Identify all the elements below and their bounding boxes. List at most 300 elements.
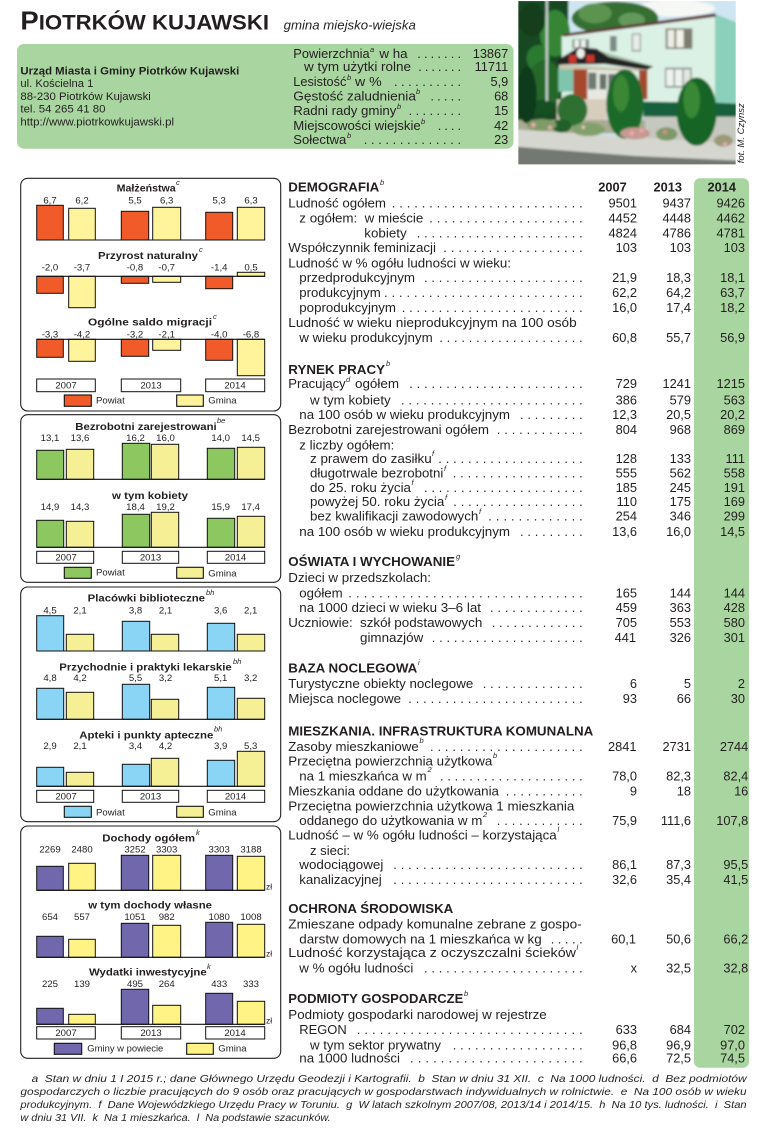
chart: w tym dochody własne: 1080 [209,912,230,923]
chart: Bezrobotni zarejestrowani: 16,0 [156,433,175,444]
section: Demografia: . . . . . . . . . . . . . . . . . . . . . . . . . . [392,195,583,210]
section: Oświata i wychowanie: Dzieci w przedszkolach: [288,570,431,585]
section: Rynek pracy: f [412,478,414,487]
chart: Placówki biblioteczne: Placówki biblioteczne [88,593,205,605]
chart: Wydatki inwestycyjne: 495 [127,979,143,990]
section: Rynek pracy: 1215 [717,376,745,391]
section: Ochrona środowiska: Ludność korzystająca z oczyszczalni ścieków [288,945,577,960]
section: Demografia: . . . . . . . . . . . . . . . . . . . [443,240,583,255]
section: Rynek pracy: 254 [616,509,637,524]
legend [54,1043,247,1055]
section: Rynek pracy: powyżej 50. roku życia [310,494,445,509]
key statistics: w ha [378,46,409,61]
section: Oświata i wychowanie: 363 [670,600,691,615]
section: Demografia: . . . . . . . . . . . . . . . . . . . . [439,330,583,345]
section: Demografia: DEMOGRAFIA [288,180,379,195]
year axis: 2013 [140,792,161,803]
year axis: 2014 [224,1028,246,1039]
chart: Ogólne saldo migracji: -6,8 [243,329,259,340]
chart: Apteki i punkty apteczne: 5,3 [244,741,257,752]
section: Podmioty gospodarcze: 97,0 [720,1037,745,1052]
footnotes: produkcyjnym. f Dane Wojewódzkiego Urzędu Pracy w Toruniu. g W latach szkolnym 2007/08, 2013/14 i 2014/15. h Na 10 tys. ludności. i Stan [19,1100,747,1111]
section: Demografia: 63,7 [720,285,745,300]
chart: Przychodnie i praktyki lekarskie: 3,2 [244,673,257,684]
chart: Ogólne saldo migracji: -2,1 [158,329,175,340]
section: Ochrona środowiska: w % ogółu ludności [298,960,413,975]
chart: Przychodnie i praktyki lekarskie: 5,5 [129,673,142,684]
section: Demografia: Ludność w % ogółu ludności w wieku: [288,255,511,270]
section: Baza noclegowa: . . . . . . . . . . . . . . . . . . . . . . . . [408,691,583,706]
chart: w tym dochody własne: zł [266,948,272,958]
key statistics: . . . . . . . . . . . . . . [364,132,461,147]
section: Demografia: . . . . . . . . . . . . . . . . . . . . . . . [417,225,583,240]
section: Demografia: 103 [670,240,691,255]
footnotes: w dniu 31 VII. k Na 1 mieszkańca. l Na podstawie szacunków. [20,1113,331,1124]
chart: Przychodnie i praktyki lekarskie: 4,8 [43,673,57,684]
chart: Apteki i punkty apteczne [37,724,265,786]
chart: Przyrost naturalny: 0,5 [244,263,258,274]
section: Rynek pracy: . . . . . . . . . [520,524,583,539]
section: Rynek pracy: d [346,375,351,384]
section: Demografia: 18,3 [666,270,691,285]
section: Mieszkania: 82,4 [723,768,748,783]
chart: Przyrost naturalny [37,245,265,308]
chart: Apteki i punkty apteczne: 3,4 [129,741,143,752]
chart: w tym kobiety: w tym kobiety [111,490,188,502]
section: Podmioty gospodarcze: Podmioty gospodarki narodowej w rejestrze [288,1007,547,1022]
section: Demografia: 9437 [663,195,691,210]
legend: Gmina [208,395,237,406]
year axis [37,551,265,564]
chart: Dochody ogółem: 2269 [39,845,61,856]
chart: w tym kobiety: 14,9 [41,502,59,513]
chart: Przyrost naturalny: -3,7 [74,263,90,274]
section: Mieszkania: 18 [677,783,691,798]
key statistics: . . . . [438,118,461,133]
section: Rynek pracy: 16,0 [666,524,691,539]
chart: w tym kobiety: 19,2 [156,502,175,513]
section: Rynek pracy: RYNEK PRACY [288,362,385,377]
panel: libraries and health charts [21,587,281,822]
key statistics: 15 [494,103,508,118]
section: Rynek pracy: 804 [616,422,637,437]
year axis: 2007 [55,792,77,803]
section: Demografia: Ludność w wieku nieprodukcyjnym na 100 osób [288,315,577,330]
key statistics: w % [354,74,382,89]
section: Mieszkania: 32,6 [612,872,637,887]
section: Mieszkania: . . . . . . . . . . . . [497,813,583,828]
panel: budget charts [21,826,281,1058]
section: Mieszkania: na 1 mieszkańca w m [299,768,427,783]
section: Rynek pracy: 191 [724,480,745,495]
section: Mieszkania: 2 [482,810,488,819]
section: Ochrona środowiska: . . . . . [551,931,583,946]
section: Podmioty gospodarcze: REGON [299,1022,347,1037]
section: Demografia: 9501 [609,195,637,210]
year axis: 2014 [225,792,247,803]
key statistics: 68 [494,88,508,104]
section: Demografia: 9426 [717,195,745,210]
section: Rynek pracy: . . . . . . . . . . . . . . . . . . . . [438,451,583,466]
section: Mieszkania: . . . . . . . . . . . [506,783,583,798]
section: Rynek pracy: f [444,464,447,473]
section: Rynek pracy: 563 [724,392,745,407]
section: Demografia: Ludność ogółem [288,195,386,210]
section: Baza noclegowa: 5 [684,676,691,691]
table header: years: 2014 [708,180,737,195]
address block: tel. 54 265 41 80 [20,104,106,116]
chart: Apteki i punkty apteczne: 2,1 [73,741,87,752]
chart: Dochody ogółem: k [196,828,201,837]
section: Oświata i wychowanie: . . . . . . . . . . . . . [492,615,583,630]
section: Mieszkania: Przeciętna powierzchnia użytkowa 1 mieszkania [288,798,575,813]
chart: Przyrost naturalny: -0,7 [158,263,175,274]
section: Mieszkania: 16 [734,783,748,798]
footnotes: gospodarczych o liczbie pracujących do 9 osób oraz pracujących w gospodarstwach indywidualnych w rolnictwie. e Na 100 osób w wieku [20,1087,747,1098]
key statistics: Lesistość [293,74,347,89]
key statistics [293,45,508,147]
chart: Ogólne saldo migracji: c [213,312,217,321]
chart: Ogólne saldo migracji: -3,2 [127,329,143,340]
table header: years [598,180,737,195]
section: Oświata i wychowanie: 705 [616,615,637,630]
section: Mieszkania: 78,0 [612,768,637,783]
section: Rynek pracy: . . . . . . . . . . . . . . . . . . . . . . . . [409,376,583,391]
panel: municipality info [17,44,514,149]
chart: Apteki i punkty apteczne: 2,9 [43,741,57,752]
section: Ochrona środowiska: 32,5 [666,960,691,975]
key statistics: Sołectwa [293,132,347,147]
chart: w tym dochody własne: 1051 [124,912,146,923]
section: Demografia: 56,9 [720,330,745,345]
title: PIOTRKÓW KUJAWSKI [20,5,269,35]
section: Podmioty gospodarcze [288,989,745,1066]
section: Ochrona środowiska: x [631,960,638,975]
section: Ochrona środowiska: darstw domowych na 1 mieszkańca w kg [299,931,542,946]
chart: Wydatki inwestycyjne: 139 [74,979,90,990]
title: gmina miejsko-wiejska [284,18,416,32]
section: Mieszkania: . . . . . . . . . . . . . . . . . . . . . . . . . . [393,872,583,887]
chart: Wydatki inwestycyjne [37,962,272,1025]
chart: w tym kobiety: 15,9 [211,502,230,513]
section: Oświata i wychowanie: 165 [616,585,637,600]
section: Mieszkania: 2731 [663,739,691,754]
section: Oświata i wychowanie: . . . . . . . . . . . . . [490,600,583,615]
chart: Bezrobotni zarejestrowani: 13,1 [41,433,59,444]
chart: Przyrost naturalny: c [199,245,203,254]
section: Mieszkania: kanalizacyjnej [299,872,382,887]
chart: w tym dochody własne: 557 [74,912,90,923]
section: Baza noclegowa: 6 [630,676,637,691]
chart: w tym dochody własne: 654 [42,912,59,923]
chart: w tym dochody własne: 982 [159,912,175,923]
section: Rynek pracy: 128 [616,451,637,466]
chart: Wydatki inwestycyjne: 333 [243,979,259,990]
key statistics: b [421,117,425,126]
section: Demografia: 103 [724,240,745,255]
legend: Gmina [208,569,237,580]
section: Rynek pracy: . . . . . . . . . . . . [497,422,583,437]
section: Rynek pracy: 245 [670,480,691,495]
section: Demografia: poprodukcyjnym [299,300,396,315]
section: Demografia: 62,2 [612,285,637,300]
section: Mieszkania: wodociągowej [298,857,383,872]
legend [64,806,237,819]
section: Rynek pracy: 133 [670,451,691,466]
section: Rynek pracy: na 100 osób w wieku produkcyjnym [299,407,510,422]
section: Mieszkania: b [420,736,424,745]
section: Rynek pracy: do 25. roku życia [310,480,412,495]
address block: Urząd Miasta i Gminy Piotrków Kujawski [20,65,239,77]
section: Oświata i wychowanie: 301 [724,630,745,645]
section: Podmioty gospodarcze: 702 [724,1022,745,1037]
chart: Bezrobotni zarejestrowani: 16,2 [126,433,145,444]
section: Mieszkania: 86,1 [612,857,637,872]
year axis [37,379,265,392]
chart: Ogólne saldo migracji: -4,0 [211,329,227,340]
key statistics: . . . . . . . . [409,103,461,118]
chart: Apteki i punkty apteczne: Apteki i punkty apteczne [79,729,213,741]
chart: Dochody ogółem: 3252 [124,845,146,856]
section: Demografia [288,178,745,345]
section: Rynek pracy [288,359,745,539]
section: Oświata i wychowanie: Uczniowie: [288,615,353,630]
key statistics: . . . . . . . [417,46,461,61]
chart: Bezrobotni zarejestrowani [37,416,265,479]
section: Mieszkania: z sieci: [310,843,350,858]
section: Ochrona środowiska: . . . . . . . . . . . . . . . . . . . . . . [424,960,583,975]
chart: Apteki i punkty apteczne: 3,9 [214,741,227,752]
section: Oświata i wychowanie [288,552,745,645]
section: Ochrona środowiska: 66,2 [723,931,748,946]
section: Rynek pracy: Pracujący [288,376,346,391]
key statistics: b [416,87,420,96]
section: Rynek pracy: 12,3 [612,407,637,422]
section: Baza noclegowa: 30 [731,691,745,706]
chart: Ogólne saldo migracji: Ogólne saldo migracji [88,317,212,329]
section: Oświata i wychowanie: ogółem [299,585,343,600]
chart: Placówki biblioteczne: 4,5 [43,605,57,616]
chart: Ogólne saldo migracji: -3,3 [42,329,58,340]
section: Oświata i wychowanie: gimnazjów [360,630,424,645]
chart: Przychodnie i praktyki lekarskie: bh [233,657,241,666]
chart: Bezrobotni zarejestrowani: 14,5 [241,433,260,444]
section: Baza noclegowa [288,658,745,706]
section: Rynek pracy: 185 [616,480,637,495]
section: Oświata i wychowanie: 441 [615,630,636,645]
year axis: 2007 [55,1028,77,1039]
section: Oświata i wychowanie: szkół podstawowych [360,615,482,630]
year axis: 2014 [224,381,246,392]
section: Rynek pracy: 562 [670,465,691,480]
section: Rynek pracy: 13,6 [612,524,637,539]
year axis [37,1027,265,1039]
key statistics: 13867 [473,46,508,61]
section: Ochrona środowiska: OCHRONA ŚRODOWISKA [288,901,453,916]
chart: Bezrobotni zarejestrowani: 13,6 [71,433,89,444]
section: Baza noclegowa: i [418,658,420,667]
section: Podmioty gospodarcze: b [464,989,468,998]
section: Mieszkania: Zasoby mieszkaniowe [288,739,419,754]
section: Mieszkania: Mieszkania oddane do użytkowania [288,783,500,798]
section: Rynek pracy: 558 [724,465,745,480]
section: Mieszkania: 107,8 [716,813,748,828]
section: Demografia: 4452 [609,210,637,225]
legend: Powiat [96,568,125,579]
chart: w tym kobiety: 18,4 [126,502,145,513]
section: Baza noclegowa: 93 [623,691,637,706]
section: Demografia: 64,2 [666,285,691,300]
chart: Bezrobotni zarejestrowani: be [217,416,225,425]
chart: Wydatki inwestycyjne: k [207,962,212,971]
chart: w tym kobiety [37,490,265,547]
section: Demografia: 4824 [609,225,637,240]
section: Oświata i wychowanie: 459 [616,600,637,615]
section: Rynek pracy: 346 [670,509,691,524]
chart: Małżeństwa: 6,7 [43,195,57,206]
table header: years: 2013 [654,180,682,195]
section: Podmioty gospodarcze: 66,6 [612,1051,637,1066]
section: Demografia: 17,4 [666,300,691,315]
section: Mieszkania: 2744 [720,739,748,754]
chart: Małżeństwa: 6,3 [160,195,173,206]
section: Podmioty gospodarcze: . . . . . . . . . . . . . . . . . . . . . . . . . . . . . . [357,1022,583,1037]
section: Oświata i wychowanie: 144 [670,585,691,600]
address block: http://www.piotrkowkujawski.pl [20,116,174,128]
section: Oświata i wychowanie: g [456,552,461,561]
section: Demografia: . . . . . . . . . . . . . . . . . . . . . [429,210,583,225]
section: Rynek pracy: 579 [670,392,691,407]
legend: Powiat [96,808,125,819]
section: Mieszkania: Przeciętna powierzchnia użytkowa [288,754,493,769]
section: Rynek pracy: . . . . . . . . . [520,407,583,422]
section: Rynek pracy: 386 [616,392,637,407]
section: Rynek pracy: na 100 osób w wieku produkcyjnym [299,524,510,539]
key statistics: Gęstość zaludnienia [293,88,417,104]
section: Podmioty gospodarcze: na 1000 ludności [299,1051,400,1066]
legend: Gmina [218,1044,247,1055]
chart: Placówki biblioteczne: 3,6 [214,605,227,616]
section: Demografia: 16,0 [612,300,637,315]
chart: Przychodnie i praktyki lekarskie: 5,1 [214,673,227,684]
legend [64,567,237,580]
section: Baza noclegowa: Turystyczne obiekty noclegowe [288,676,473,691]
section: Ochrona środowiska [288,901,748,975]
section: Rynek pracy: . . . . . . . . . . . . . [488,509,583,524]
section: Demografia: b [380,178,384,187]
section: Rynek pracy: z liczby ogółem: [299,437,394,452]
year axis [37,790,265,803]
section: Ochrona środowiska: Zmieszane odpady komunalne zebrane z gospo- [288,916,582,931]
chart: Placówki biblioteczne: 2,1 [159,605,172,616]
section: Demografia: . . . . . . . . . . . . . . . . . . . . . . [424,270,583,285]
section: Baza noclegowa: 66 [677,691,691,706]
key statistics: b [397,102,401,111]
address block: 88-230 Piotrków Kujawski [20,91,151,103]
chart: w tym kobiety: 17,4 [241,502,261,513]
section: Mieszkania: l [558,825,560,834]
chart: Dochody ogółem: 3188 [240,845,262,856]
section: Mieszkania: oddanego do użytkowania w m [299,813,482,828]
section: Rynek pracy: długotrwale bezrobotni [310,465,443,480]
key statistics: Miejscowości wiejskie [293,118,421,133]
section: Rynek pracy: 175 [670,494,691,509]
footnotes [19,1074,747,1124]
section: Rynek pracy: 20,5 [666,407,691,422]
chart: Placówki biblioteczne: 2,1 [244,605,257,616]
year axis: 2013 [140,1028,162,1039]
section: Podmioty gospodarcze: 633 [616,1022,637,1037]
address block: ul. Kościelna 1 [20,78,94,90]
section: Ochrona środowiska: 50,6 [666,931,691,946]
legend: Gmina [208,808,237,819]
year axis: 2013 [140,381,162,392]
section: Ochrona środowiska: 32,8 [723,960,748,975]
section: Ochrona środowiska: 60,1 [611,931,636,946]
section: Demografia: 60,8 [612,330,637,345]
chart: Bezrobotni zarejestrowani: 14,0 [211,433,230,444]
chart: Małżeństwa: 5,5 [128,195,142,206]
chart: w tym kobiety: 14,3 [71,502,89,513]
section: Podmioty gospodarcze: . . . . . . . . . . . . . . . . . . [453,1037,583,1052]
photo credit: fot. M. Czynsz [736,103,747,163]
chart: Placówki biblioteczne [37,588,265,651]
chart: Przyrost naturalny: -2,0 [42,263,58,274]
chart: w tym dochody własne: w tym dochody własne [87,900,212,912]
section: Rynek pracy: 729 [616,376,637,391]
section: Mieszkania: Ludność – w % ogółu ludności – korzystająca [288,827,558,842]
section: Demografia: 55,7 [666,330,691,345]
chart: Bezrobotni zarejestrowani: Bezrobotni zarejestrowani [75,421,217,433]
chart: Dochody ogółem: 3303 [209,845,230,856]
chart: Małżeństwa: 5,3 [213,195,226,206]
chart: Wydatki inwestycyjne: Wydatki inwestycyjne [89,967,207,979]
chart: Placówki biblioteczne: 2,1 [73,605,87,616]
chart: Przyrost naturalny: -0,8 [127,263,143,274]
section: Demografia: z ogółem: w mieście [299,210,423,225]
key statistics: 11711 [475,59,508,74]
year axis: 2007 [55,381,77,392]
section: Demografia: produkcyjnym [299,285,381,300]
chart: Dochody ogółem [37,828,272,891]
section: Rynek pracy: 14,5 [720,524,745,539]
chart: Małżeństwa [37,178,265,240]
chart: Placówki biblioteczne: bh [206,588,214,597]
section: Demografia: 4448 [663,210,691,225]
section: Oświata i wychowanie: 144 [724,585,745,600]
chart: w tym dochody własne: 1008 [240,912,262,923]
key statistics: b [347,131,351,140]
section: Demografia: 103 [616,240,637,255]
section: Baza noclegowa: BAZA NOCLEGOWA [288,661,417,676]
footnotes: a Stan w dniu 1 I 2015 r.; dane Głównego Urzędu Geodezji i Kartografii. b Stan w dniu 31 XII. c Na 1000 ludności. d Bez podmiotów [32,1074,747,1085]
section: Demografia: 18,1 [720,270,745,285]
photo: municipal office building [515,0,742,167]
section: Oświata i wychowanie: 580 [724,615,745,630]
chart: Dochody ogółem: Dochody ogółem [102,833,195,845]
chart: Ogólne saldo migracji: -4,2 [74,329,90,340]
section: Rynek pracy: . . . . . . . . . . . . . . . . . . . . . . [424,480,583,495]
section: Mieszkania: 111,6 [661,813,691,828]
year axis: 2014 [225,552,247,564]
chart: Dochody ogółem: 3303 [156,845,177,856]
section: Podmioty gospodarcze: 96,9 [666,1037,691,1052]
key statistics: . . . . . . . . . . [394,74,461,89]
section: Rynek pracy: Bezrobotni zarejestrowani ogółem [288,422,489,437]
section: Rynek pracy: w tym kobiety [309,392,391,407]
chart: Małżeństwa: 6,3 [244,195,258,206]
key statistics: . . . . . . . [418,59,461,74]
